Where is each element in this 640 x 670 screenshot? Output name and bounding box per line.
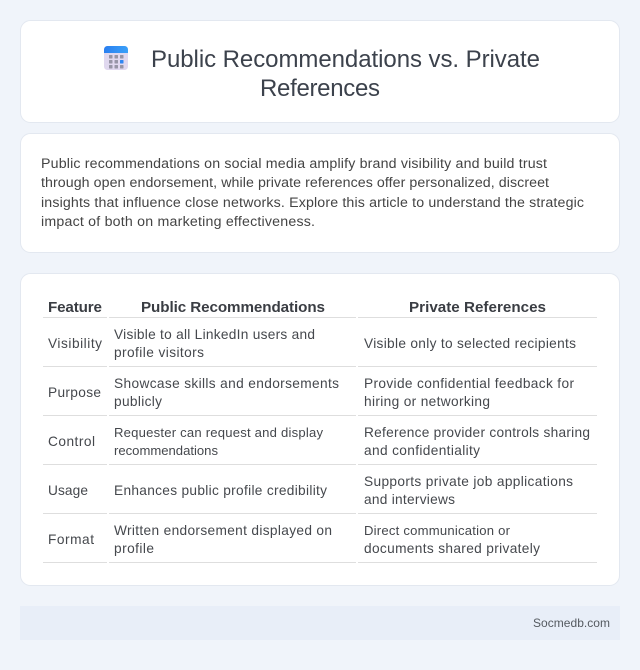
title xyxy=(151,46,540,102)
row: usage: Supports private job applications xyxy=(364,474,573,489)
row: format: profile xyxy=(114,541,154,556)
row: format xyxy=(48,523,540,556)
row: visibility: Visibility xyxy=(48,336,102,351)
row: usage: Usage xyxy=(48,483,88,498)
panel: intro paragraph xyxy=(20,134,620,252)
row: purpose: publicly xyxy=(114,394,162,409)
row: control: recommendations xyxy=(114,443,218,458)
title: Public Recommendations vs. Private xyxy=(151,46,540,73)
table header: Feature xyxy=(48,299,102,316)
row: control: Control xyxy=(48,434,95,449)
panel: comparison table xyxy=(20,274,620,586)
table header: Private References xyxy=(409,299,546,316)
row: visibility: Visible only to selected recipients xyxy=(364,336,576,351)
table header xyxy=(48,299,546,316)
panel: title card xyxy=(20,20,620,122)
row: visibility: Visible to all LinkedIn users and xyxy=(114,327,315,342)
table header: Public Recommendations xyxy=(141,299,325,316)
row: purpose: Showcase skills and endorsements xyxy=(114,376,339,391)
title: References xyxy=(260,75,380,102)
row: control: Requester can request and display xyxy=(114,425,323,440)
row: usage: and interviews xyxy=(364,492,455,507)
row: control: and confidentiality xyxy=(364,443,480,458)
icon: calendar xyxy=(104,46,128,70)
row: purpose xyxy=(48,376,574,409)
row: usage: Enhances public profile credibility xyxy=(114,483,327,498)
row: visibility xyxy=(48,327,576,360)
panel: intro paragraph: insights that influence close networks. Explore this article to understand the strategic xyxy=(41,195,584,211)
row: format: Direct communication or xyxy=(364,523,511,538)
panel: intro paragraph: impact of both on marketing effectiveness. xyxy=(41,214,315,230)
panel: intro paragraph: Public recommendations on social media amplify brand visibility and build trust xyxy=(41,156,547,172)
row: format: Format xyxy=(48,532,94,547)
row: control: Reference provider controls sharing xyxy=(364,425,590,440)
row: usage xyxy=(48,474,573,507)
row: purpose: Provide confidential feedback for xyxy=(364,376,574,391)
row: purpose: Purpose xyxy=(48,385,101,400)
row: format: documents shared privately xyxy=(364,541,540,556)
row: purpose: hiring or networking xyxy=(364,394,490,409)
row: control xyxy=(48,425,590,458)
footer: Socmedb.com xyxy=(533,616,610,630)
footer xyxy=(20,606,620,640)
row: format: Written endorsement displayed on xyxy=(114,523,332,538)
panel: intro paragraph: through open endorsement, while private references offer personalized, discreet xyxy=(41,175,549,191)
row: visibility: profile visitors xyxy=(114,345,204,360)
